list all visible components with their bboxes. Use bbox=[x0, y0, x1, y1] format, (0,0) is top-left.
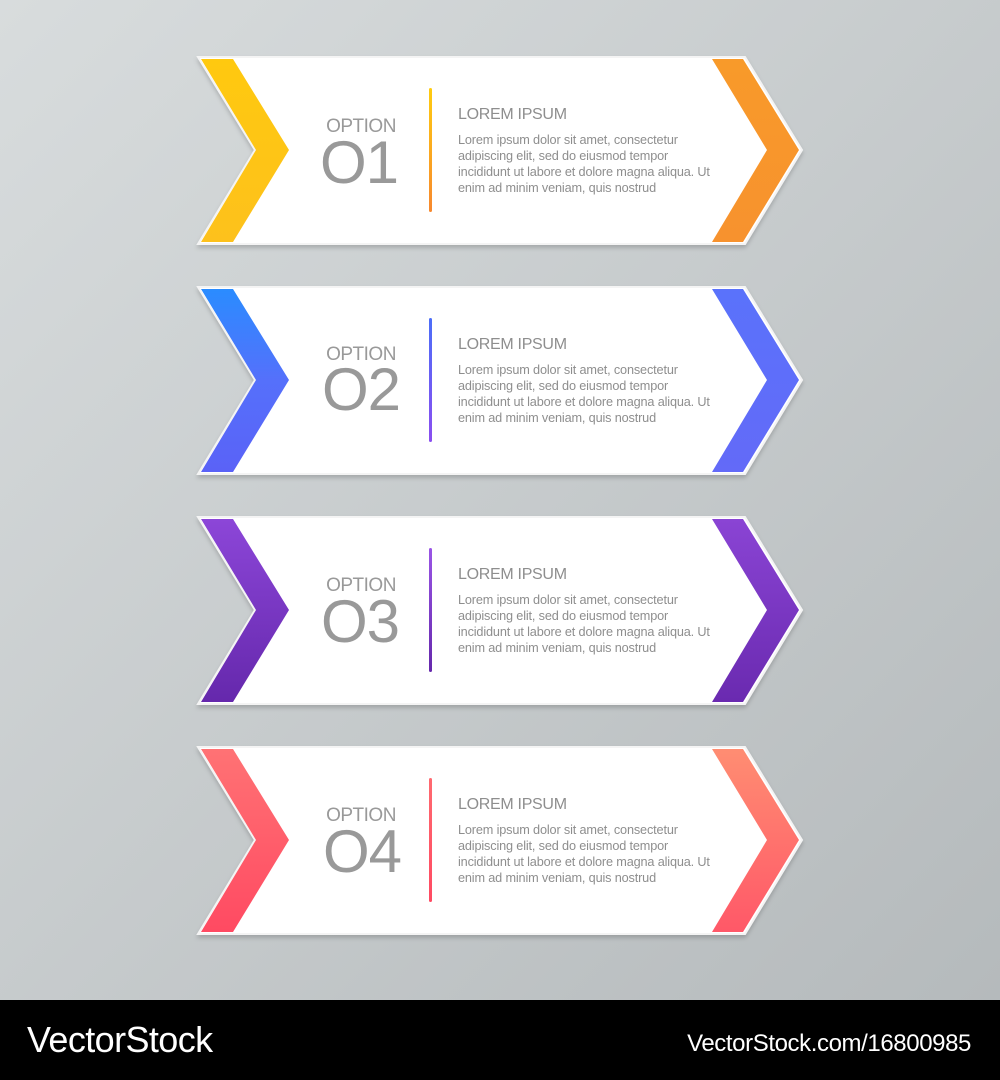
option number 02: OPTION bbox=[326, 344, 396, 365]
icon: left chevron 04 bbox=[201, 749, 289, 932]
panel: option 02 bbox=[198, 287, 802, 474]
text block 01: enim ad minim veniam, quis nostrud bbox=[458, 181, 656, 195]
option number 02: O2 bbox=[322, 356, 400, 423]
panel: option 03 bbox=[198, 517, 802, 704]
text block 02: LOREM IPSUM bbox=[458, 336, 567, 353]
text block 01: Lorem ipsum dolor sit amet, consectetur bbox=[458, 133, 679, 147]
text block 03: incididunt ut labore et dolore magna aliqua. Ut bbox=[458, 625, 710, 639]
icon: right chevron 03 bbox=[712, 519, 799, 702]
text block 04: incididunt ut labore et dolore magna aliqua. Ut bbox=[458, 855, 710, 869]
text block 01: adipiscing elit, sed do eiusmod tempor bbox=[458, 149, 669, 163]
text block 01 bbox=[458, 106, 710, 195]
text block 02 bbox=[458, 336, 710, 425]
text block 04 bbox=[458, 796, 710, 885]
panel: option 04 bbox=[198, 747, 802, 934]
footer bar: VectorStock bbox=[27, 1019, 214, 1060]
text block 04: Lorem ipsum dolor sit amet, consectetur bbox=[458, 823, 679, 837]
option number 01: O1 bbox=[320, 129, 398, 196]
icon: left chevron 02 bbox=[201, 289, 289, 472]
text block 02: adipiscing elit, sed do eiusmod tempor bbox=[458, 379, 669, 393]
text block 01: LOREM IPSUM bbox=[458, 106, 567, 123]
text block 03: LOREM IPSUM bbox=[458, 566, 567, 583]
option number 03: OPTION bbox=[326, 575, 396, 596]
icon: right chevron 01 bbox=[712, 59, 799, 242]
text block 04: LOREM IPSUM bbox=[458, 796, 567, 813]
option number 04: OPTION bbox=[326, 805, 396, 826]
text block 03: adipiscing elit, sed do eiusmod tempor bbox=[458, 609, 669, 623]
icon: right chevron 04 bbox=[712, 749, 799, 932]
text block 03: enim ad minim veniam, quis nostrud bbox=[458, 641, 656, 655]
text block 04: enim ad minim veniam, quis nostrud bbox=[458, 871, 656, 885]
option number 03: O3 bbox=[321, 588, 399, 655]
text block 03 bbox=[458, 566, 710, 655]
option number 01: OPTION bbox=[326, 116, 396, 137]
text block 02: enim ad minim veniam, quis nostrud bbox=[458, 411, 656, 425]
panel: option 01 bbox=[198, 57, 802, 244]
text block 04: adipiscing elit, sed do eiusmod tempor bbox=[458, 839, 669, 853]
text block 01: incididunt ut labore et dolore magna aliqua. Ut bbox=[458, 165, 710, 179]
option number 04: O4 bbox=[323, 818, 401, 885]
icon: left chevron 01 bbox=[201, 59, 289, 242]
text block 02: Lorem ipsum dolor sit amet, consectetur bbox=[458, 363, 679, 377]
text block 02: incididunt ut labore et dolore magna aliqua. Ut bbox=[458, 395, 710, 409]
footer bar: VectorStock.com/16800985 bbox=[687, 1030, 971, 1057]
text block 03: Lorem ipsum dolor sit amet, consectetur bbox=[458, 593, 679, 607]
icon: right chevron 02 bbox=[712, 289, 799, 472]
icon: left chevron 03 bbox=[201, 519, 289, 702]
footer bar bbox=[0, 1000, 1000, 1080]
